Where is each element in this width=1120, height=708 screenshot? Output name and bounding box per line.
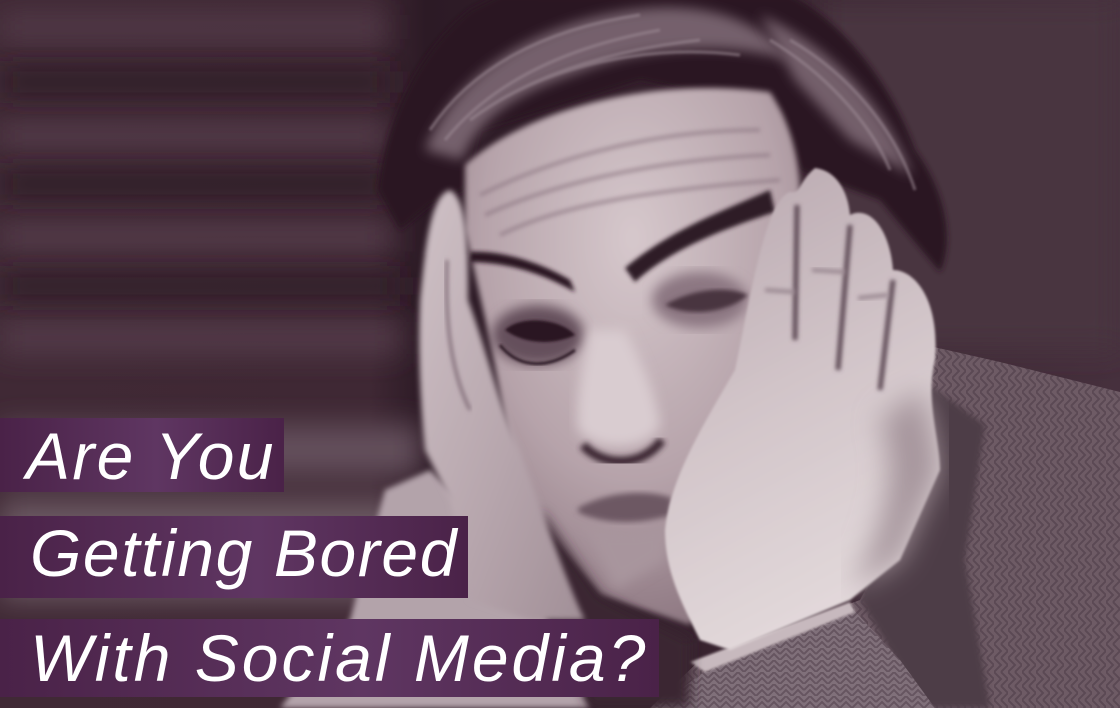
face	[465, 88, 800, 708]
banner: Are You	[0, 418, 284, 492]
title line 1: Are You	[26, 419, 276, 493]
title line 2: Getting Bored	[30, 516, 458, 590]
banner: With Social Media?	[0, 619, 659, 697]
right hand	[665, 168, 940, 650]
forehead wrinkles	[480, 130, 780, 235]
hair	[378, 0, 947, 272]
banner: Getting Bored	[0, 516, 468, 598]
left hand	[419, 190, 585, 620]
jacket	[280, 345, 1120, 708]
title line 3: With Social Media?	[30, 621, 648, 695]
